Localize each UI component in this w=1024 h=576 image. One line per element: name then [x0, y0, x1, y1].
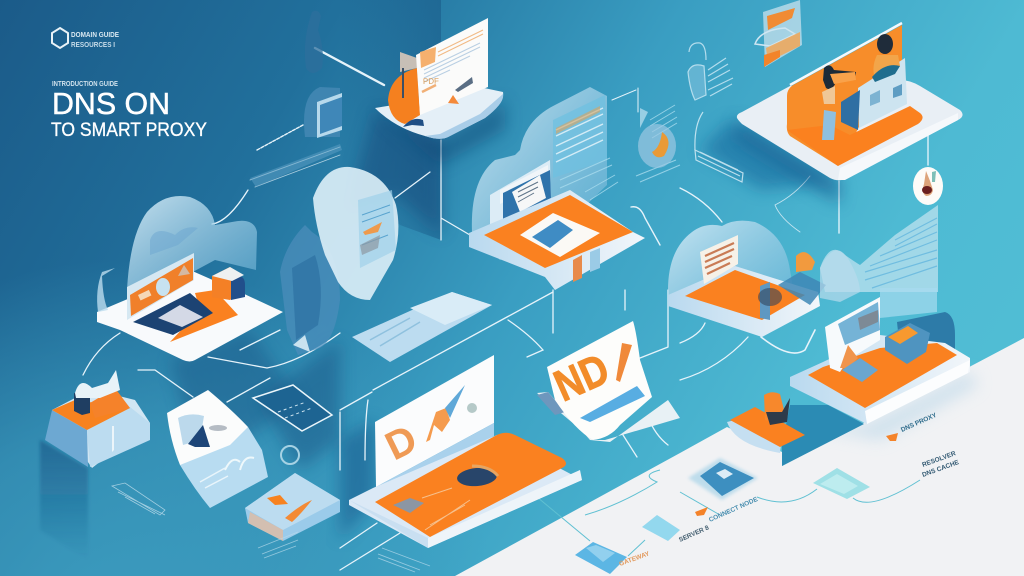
shadow [375, 100, 505, 165]
title: DNS ON [52, 86, 170, 121]
icon: ring [281, 446, 299, 464]
light blue lower [180, 427, 268, 508]
light blue wardrobe [858, 58, 907, 128]
orange gadget [796, 252, 815, 272]
orange box [212, 267, 245, 300]
floor shadow under right platform [800, 372, 978, 440]
panel: top center document on tray [375, 18, 505, 165]
floating text note lower left [112, 483, 165, 515]
bubble [313, 167, 398, 300]
base [668, 266, 820, 337]
panel: small light diamond on floor [642, 515, 680, 541]
panel: paper with figure [167, 390, 268, 508]
card letters: ND [547, 344, 616, 411]
tray [375, 85, 503, 139]
panel: center dome with orange platform [469, 87, 645, 290]
node tip [293, 335, 310, 352]
white platform [97, 270, 283, 362]
white diamond platform [737, 80, 963, 180]
top [52, 395, 150, 468]
body [280, 225, 340, 355]
orange top [808, 343, 957, 408]
document page [416, 18, 488, 115]
orange half dome [388, 68, 420, 124]
arch back [127, 196, 257, 295]
dark pill [456, 466, 498, 488]
connector lines [83, 48, 928, 570]
logo text: DOMAIN GUIDE [71, 32, 119, 39]
screen window [490, 160, 551, 228]
picture [178, 414, 204, 445]
orange screen [127, 253, 194, 320]
panel: blue diamond on floor [688, 458, 758, 500]
panel: flat tilted document [352, 292, 492, 362]
platform base [469, 190, 645, 290]
arch [668, 221, 795, 320]
stripes [880, 288, 937, 318]
cloud beside right platform [820, 250, 860, 302]
white card [825, 297, 880, 372]
floor labels: DNS PROXY [900, 412, 938, 434]
white side [727, 420, 781, 453]
orange top [730, 407, 805, 447]
shadow [735, 118, 840, 205]
orange floor [787, 106, 923, 166]
orange wall [787, 25, 902, 166]
panel: left note bracket [97, 268, 115, 312]
small clip and monitor icon upper left [250, 11, 342, 187]
white square [520, 213, 600, 257]
panel: small orange platform with figure [727, 392, 864, 466]
gray chip [393, 498, 424, 513]
subtitle: TO SMART PROXY [51, 119, 207, 141]
platform orange top [484, 195, 633, 268]
paper [547, 321, 652, 440]
logo icon [52, 28, 68, 48]
floor labels: RESOLVER [921, 450, 957, 469]
blue card [532, 220, 573, 248]
left face [45, 410, 88, 467]
panel: top right orange room [735, 23, 963, 205]
panel: right orange platform [790, 288, 970, 424]
floor labels [618, 412, 961, 568]
orange floor [170, 290, 238, 342]
side stripe [573, 255, 582, 282]
figure one [823, 65, 856, 89]
floating notes right of center dome [560, 105, 680, 200]
navy mat [133, 293, 213, 335]
figure two [877, 34, 893, 54]
floor labels: CONNECT NODE [708, 496, 760, 524]
panel: bottom left orange box [45, 370, 150, 468]
panel: right striped document [820, 205, 938, 292]
orange top [685, 270, 805, 320]
orange top [52, 400, 130, 430]
orange folder [90, 388, 130, 418]
box [885, 323, 930, 364]
white top edge [790, 23, 902, 85]
icon: lock outline with list [688, 43, 733, 100]
page label: PDF [423, 76, 439, 86]
screen [700, 235, 738, 284]
floor connector curves [537, 470, 920, 556]
gray sheet [158, 305, 203, 327]
orange letters: D [379, 417, 424, 469]
floor tablet [842, 358, 878, 382]
floor labels: DNS CACHE [921, 459, 961, 479]
white upper [167, 390, 248, 465]
panel: center translucent head bubble [280, 167, 398, 355]
teal wall behind [782, 405, 864, 466]
figure [764, 392, 784, 423]
stripes panel [553, 95, 607, 178]
background lower glow [0, 240, 520, 576]
floor labels: SERVER 8 [678, 524, 710, 544]
background dark tower shadows [40, 0, 840, 560]
icon: round droplet badge [913, 167, 943, 205]
dark wall [897, 312, 955, 360]
navy block [74, 393, 90, 415]
panel: cloud arch with orange platform [668, 221, 826, 337]
white screen [375, 355, 494, 487]
floor labels: GATEWAY [618, 550, 651, 568]
panel: small book [245, 473, 340, 541]
panel: dark code card [253, 385, 332, 431]
blue bar [580, 386, 645, 422]
floating orange badge [638, 108, 676, 168]
panel: top right floating cards [755, 0, 802, 67]
white diagonal floor [455, 338, 1024, 576]
eyebrow text: INTRODUCTION GUIDE [52, 79, 118, 88]
panel: left orange screen platform [97, 196, 283, 362]
floating text note bottom center [258, 532, 430, 572]
panel: big DNS screen with orange platform [349, 355, 582, 548]
base [790, 335, 970, 424]
panel: NDI paper card [537, 321, 680, 442]
panel: small blue pill box on floor [575, 542, 627, 574]
fold [537, 392, 680, 442]
logo: RESOURCES I [71, 42, 115, 49]
dome back [472, 87, 607, 260]
base [349, 435, 582, 548]
dark blue box [841, 90, 860, 130]
panel: teal diamond on floor [813, 468, 870, 499]
right face [87, 407, 150, 467]
icon: laptop outline [695, 112, 743, 182]
logo [52, 28, 119, 49]
orange top [375, 433, 566, 537]
